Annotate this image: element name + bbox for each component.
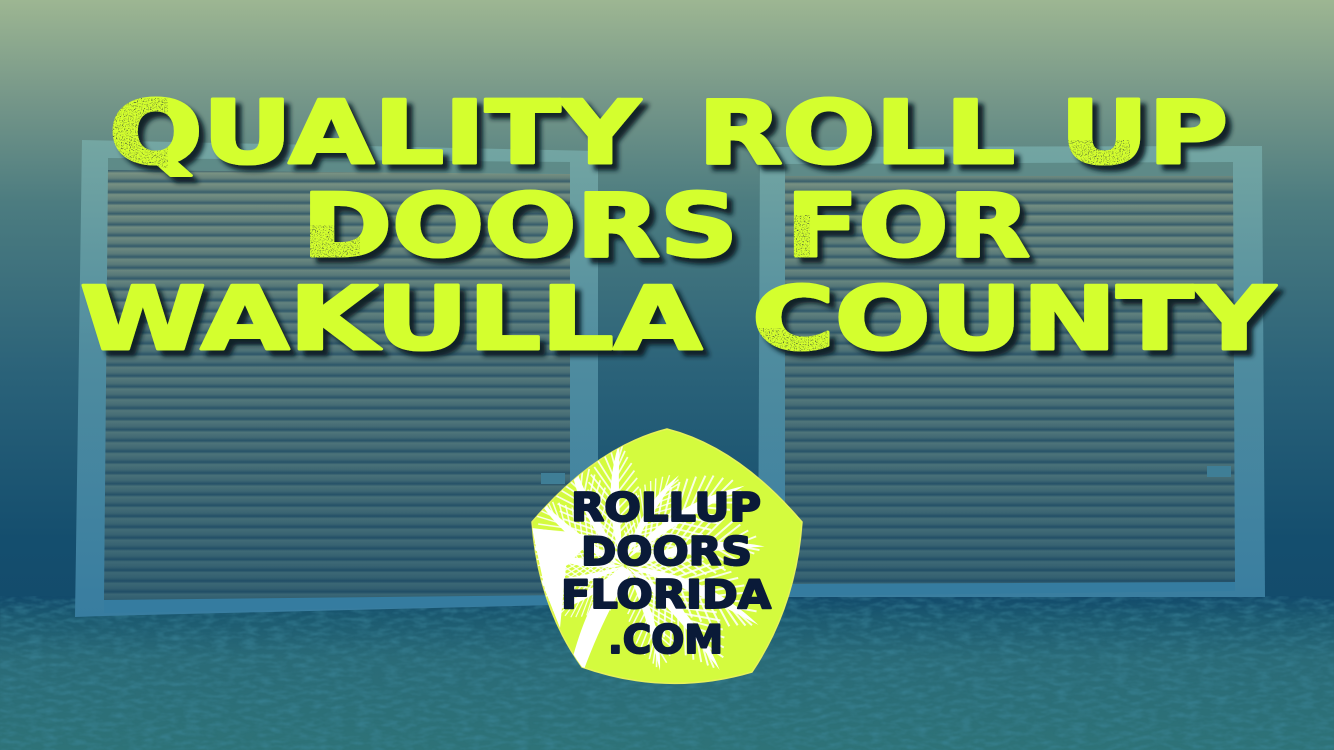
logo badge <box>519 429 802 683</box>
title <box>80 82 1276 370</box>
title: COUNTY <box>752 268 1276 370</box>
logo text: .COM <box>608 618 723 663</box>
logo text: DOORS <box>581 530 752 575</box>
logo text <box>561 486 771 663</box>
title: QUALITY <box>109 82 641 184</box>
logo text: ROLLUP <box>571 486 761 531</box>
title: FOR <box>786 175 1030 277</box>
right roll up door <box>758 146 1265 597</box>
left roll up door <box>75 140 598 617</box>
ground: grass <box>0 596 1334 750</box>
title: WAKULLA <box>80 268 702 370</box>
icon: palm tree <box>532 446 764 670</box>
title: DOORS <box>302 175 738 277</box>
title: UP <box>1060 82 1228 184</box>
title: ROLL <box>698 82 1015 184</box>
badge shape <box>532 429 802 683</box>
logo text: FLORIDA <box>561 573 771 618</box>
